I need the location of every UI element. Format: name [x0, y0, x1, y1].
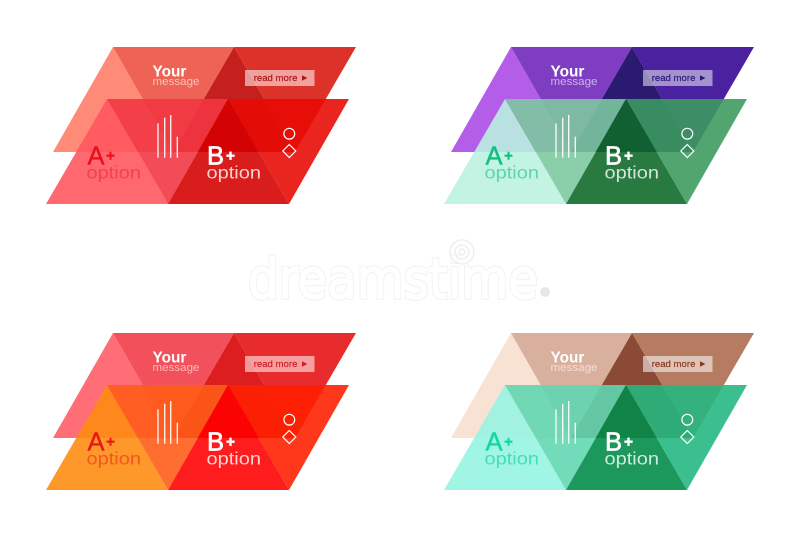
icon: bars — [556, 115, 575, 158]
watermark: dreamstime — [248, 247, 538, 311]
icon: circle and diamond — [681, 414, 694, 444]
panel: brown and teal bottom-right — [444, 333, 754, 490]
front band — [444, 385, 747, 490]
label: B+ option: + — [624, 147, 633, 164]
icon: circle and diamond — [681, 128, 694, 158]
label: A+ option: option — [86, 448, 141, 468]
icon: bars — [158, 115, 177, 158]
heading: Your message — [550, 350, 598, 374]
heading: Your message — [152, 350, 200, 374]
heading: Your message: message — [152, 362, 200, 374]
heading: Your message — [550, 64, 598, 88]
button: read more — [643, 356, 712, 372]
watermark: dreamstime — [248, 247, 538, 311]
label: A+ option — [86, 428, 141, 468]
back band — [451, 333, 754, 438]
label: A+ option: A — [486, 428, 503, 456]
heading: Your message: message — [152, 76, 200, 88]
heading: Your message: Your — [152, 350, 186, 367]
label: B+ option — [604, 142, 659, 182]
label: A+ option — [86, 142, 141, 182]
heading: Your message: Your — [550, 350, 584, 367]
label: A+ option — [484, 142, 539, 182]
label: A+ option: + — [106, 433, 115, 450]
label: B+ option: option — [206, 448, 261, 468]
label: B+ option — [206, 428, 261, 468]
label: A+ option: + — [504, 433, 513, 450]
heading: Your message: message — [550, 76, 598, 88]
label: A+ option: option — [484, 162, 539, 182]
label: A+ option: + — [106, 147, 115, 164]
panel: purple and green top-right — [444, 47, 754, 204]
label: A+ option: option — [86, 162, 141, 182]
heading: Your message: message — [550, 362, 598, 374]
back band — [451, 47, 754, 152]
label: B+ option: + — [624, 433, 633, 450]
label: A+ option: option — [484, 448, 539, 468]
icon: circle and diamond — [283, 128, 296, 158]
label: A+ option: A — [486, 142, 503, 170]
panel: red and orange bottom-left — [46, 333, 356, 490]
button: read more — [643, 70, 712, 86]
icon: circle and diamond — [283, 414, 296, 444]
label: A+ option: + — [504, 147, 513, 164]
front band — [444, 99, 747, 204]
label: B+ option: B — [605, 142, 622, 170]
heading: Your message: Your — [152, 64, 186, 81]
label: B+ option: option — [206, 162, 261, 182]
button: read more: read more — [652, 73, 695, 84]
icon: bars — [556, 401, 575, 444]
label: B+ option — [604, 428, 659, 468]
button: read more: read more — [254, 359, 297, 370]
label: B+ option: + — [226, 147, 235, 164]
label: B+ option: B — [605, 428, 622, 456]
label: A+ option: A — [88, 142, 105, 170]
label: A+ option — [484, 428, 539, 468]
label: B+ option — [206, 142, 261, 182]
label: B+ option: B — [207, 142, 224, 170]
label: B+ option: option — [604, 162, 659, 182]
back band — [53, 47, 356, 152]
button: read more: read more — [652, 359, 695, 370]
button: read more — [245, 70, 314, 86]
panel: red top-left — [46, 47, 356, 204]
heading: Your message — [152, 64, 200, 88]
icon: bars — [158, 401, 177, 444]
label: B+ option: option — [604, 448, 659, 468]
heading: Your message: Your — [550, 64, 584, 81]
label: A+ option: A — [88, 428, 105, 456]
label: B+ option: + — [226, 433, 235, 450]
front band — [46, 385, 349, 490]
button: read more: read more — [254, 73, 297, 84]
button: read more — [245, 356, 314, 372]
label: B+ option: B — [207, 428, 224, 456]
front band — [46, 99, 349, 204]
back band — [53, 333, 356, 438]
